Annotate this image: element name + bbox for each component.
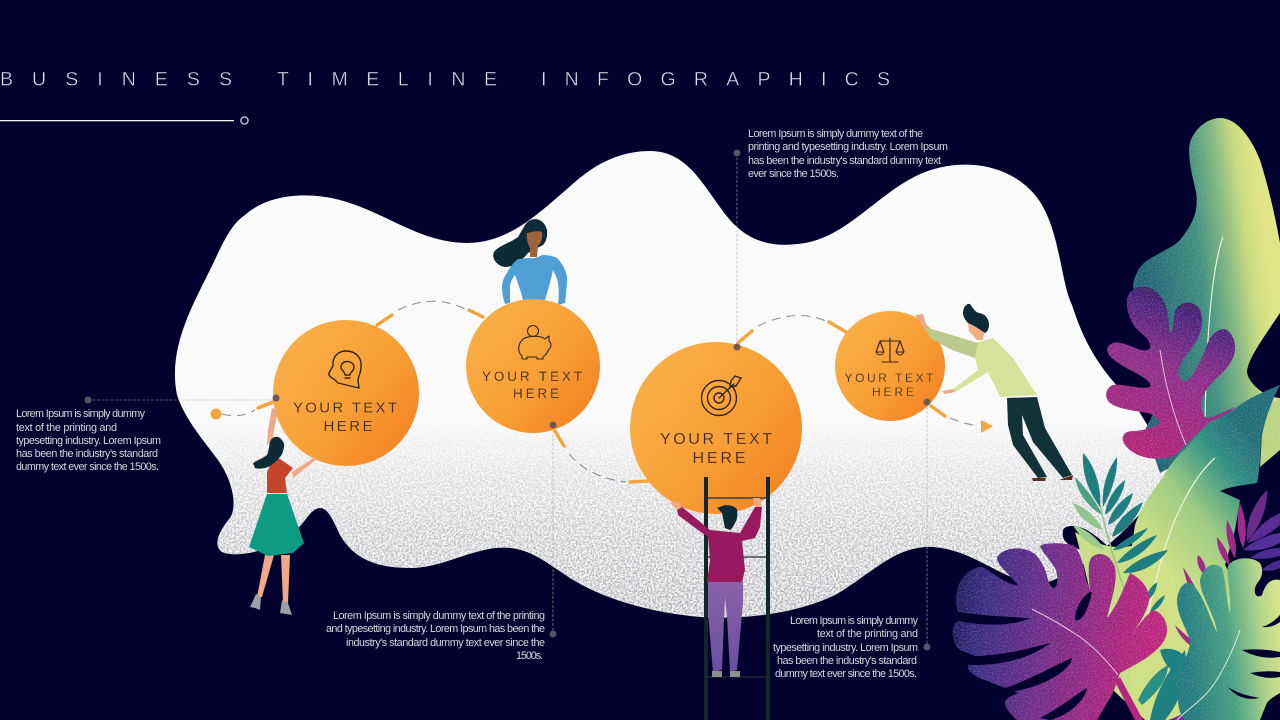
circle 2 label — [482, 369, 582, 401]
person: woman in blue — [493, 219, 567, 305]
leaf: teal fern — [1073, 453, 1168, 612]
leaf: purple monstera — [945, 543, 1167, 720]
title: BUSINESS — [0, 68, 232, 90]
title underline — [0, 117, 248, 124]
start dot — [210, 408, 222, 420]
circle 2 — [466, 299, 600, 433]
icon: piggy bank — [519, 326, 551, 359]
title — [0, 68, 890, 90]
ladder — [704, 477, 770, 720]
circle 3 label: HERE — [692, 450, 746, 467]
title: TIMELINE — [277, 68, 497, 90]
icon: scales — [876, 338, 904, 362]
person: woman with teal skirt — [249, 408, 317, 615]
leaf: yellow-green under fern — [1075, 532, 1135, 690]
text block: bottom right — [773, 615, 919, 680]
text block: bottom centre: industry's standard dummy text ever since the — [346, 637, 545, 649]
text block: bottom centre: and typesetting industry. Lorem Ipsum has been the — [326, 623, 545, 635]
circle 3 — [630, 342, 802, 514]
text block: bottom right: typesetting industry. Lorem Ipsum — [773, 642, 918, 654]
text block: top: printing and typesetting industry. Lorem Ipsum — [748, 141, 948, 153]
text block: bottom right: dummy text ever since the 1500s. — [775, 668, 917, 680]
leaf: purple oak — [1106, 287, 1235, 459]
text block: left: dummy text ever since the 1500s. — [16, 461, 159, 473]
circle 2 label: HERE — [513, 386, 559, 401]
white blob backdrop — [174, 151, 1168, 618]
icon: target with arrow — [702, 376, 741, 416]
text block: left: text of the printing and — [16, 422, 117, 434]
text block: bottom right: Lorem Ipsum is simply dummy — [790, 615, 919, 627]
text block: bottom right: has been the industry's standard — [777, 655, 917, 667]
text block: bottom centre: 1500s. — [516, 650, 543, 662]
circle 1 label: HERE — [324, 418, 372, 435]
circle 4 label: HERE — [872, 385, 914, 399]
text block: top: has been the industry's standard dummy text — [748, 155, 941, 167]
circle 4 — [835, 311, 945, 421]
text block: left: has been the industry's standard — [16, 448, 158, 460]
leaf: purple fern — [1175, 490, 1280, 655]
text block: bottom centre: Lorem Ipsum is simply dummy text of the printing — [333, 610, 545, 622]
text block: top: ever since the 1500s. — [748, 168, 839, 180]
curved dashed timeline — [222, 301, 978, 482]
text block: bottom centre — [326, 610, 545, 662]
text block: top: Lorem Ipsum is simply dummy text of the — [748, 128, 923, 140]
connector guide lines — [88, 153, 927, 647]
person: on ladder — [670, 498, 762, 677]
title: INFOGRAPHICS — [541, 68, 890, 90]
text block: left: typesetting industry. Lorem Ipsum — [16, 435, 161, 447]
text block: bottom right: text of the printing and — [817, 628, 918, 640]
circle 1 — [273, 320, 419, 466]
text block: left: Lorem Ipsum is simply dummy — [16, 408, 146, 420]
circle 1 label — [293, 400, 397, 435]
connector dots — [272, 344, 930, 428]
leaf: navy shadow swoosh — [1063, 488, 1262, 558]
person: man pushing — [915, 304, 1073, 481]
circle 1 label: YOUR TEXT — [293, 400, 397, 416]
circle 2 label: YOUR TEXT — [482, 369, 582, 384]
arrow head — [981, 420, 993, 433]
leaf: green monstera — [1175, 558, 1280, 720]
end dots — [84, 150, 930, 650]
leaf: big green feather — [1113, 385, 1280, 720]
leaf: bottom sprigs — [1115, 649, 1215, 720]
circle 4 label: YOUR TEXT — [844, 371, 934, 385]
circle 3 label: YOUR TEXT — [660, 431, 772, 448]
circle 3 label — [660, 431, 772, 467]
text block: top — [748, 128, 948, 180]
icon: head with bulb — [329, 351, 361, 388]
text block: left — [16, 408, 161, 473]
leaf: tall green — [1133, 118, 1280, 473]
circle 4 label — [844, 371, 934, 399]
